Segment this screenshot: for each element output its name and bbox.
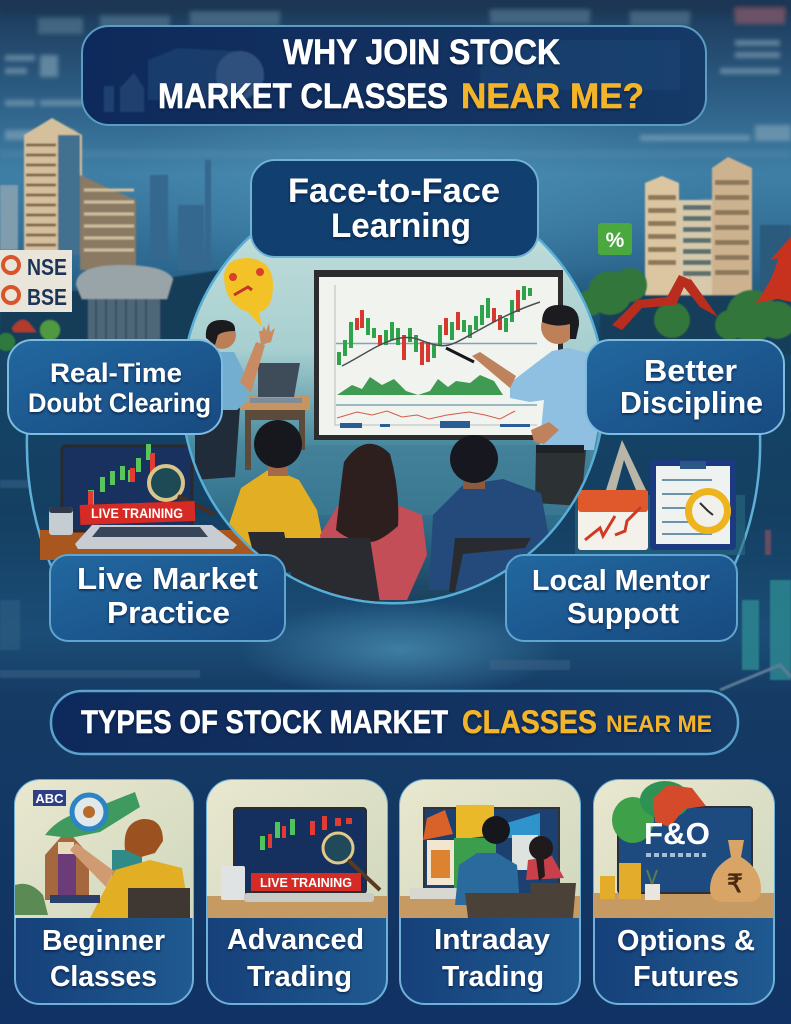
callout: Better Discipline: Better xyxy=(644,353,737,388)
section heading banner xyxy=(51,691,738,754)
card: Intraday Trading: Trading xyxy=(442,961,544,993)
card art: live training laptop: LIVE TRAINING xyxy=(260,875,352,890)
card art: beginner learner: ABC xyxy=(35,791,64,806)
callout: Real-Time Doubt Clearing: Real-Time xyxy=(50,358,182,388)
card art: F&O screen and money bag: F&O xyxy=(644,816,710,851)
card art: traders at screen xyxy=(400,780,580,918)
card: Advanced Trading: Advanced xyxy=(227,924,364,956)
callout: Face-to-Face Learning: Learning xyxy=(331,207,471,245)
audience: pink top student xyxy=(320,444,427,600)
NSE BSE sign xyxy=(0,250,72,312)
center classroom circle xyxy=(184,234,602,604)
section heading banner: TYPES OF STOCK MARKET xyxy=(81,704,448,740)
card: Intraday Trading: Intraday xyxy=(434,924,550,956)
card art: live training laptop xyxy=(207,780,387,918)
bottom right faded bars xyxy=(0,480,791,690)
callout: Face-to-Face Learning: Face-to-Face xyxy=(288,172,500,210)
card: Advanced Trading xyxy=(207,780,387,1004)
callout: Real-Time Doubt Clearing xyxy=(8,340,222,434)
NSE BSE sign: NSE xyxy=(27,254,67,280)
left laptop: live market practice: LIVE TRAINING xyxy=(91,505,183,521)
student raising hand xyxy=(195,320,310,480)
trees and red growth arrows xyxy=(577,237,791,342)
callout: Face-to-Face Learning xyxy=(251,160,538,257)
icon: green percent tag: % xyxy=(606,229,625,252)
icon: confused emoji speech bubble xyxy=(224,258,273,327)
card: Options and Futures xyxy=(594,780,774,1004)
audience: yellow shirt student xyxy=(227,420,323,560)
audience: navy shirt student xyxy=(429,435,550,590)
skyline right xyxy=(600,157,791,355)
callout: Local Mentor Suppott: Suppott xyxy=(567,598,679,630)
card: Options and Futures: Options & xyxy=(617,925,755,957)
callout: Local Mentor Suppott: Local Mentor xyxy=(532,565,710,597)
callout: Local Mentor Suppott xyxy=(506,555,737,641)
title text xyxy=(158,33,644,116)
outer ring arcs xyxy=(27,434,760,566)
title text: NEAR ME? xyxy=(461,77,644,116)
card: Beginner Classes xyxy=(15,780,193,1004)
card: Options and Futures: Futures xyxy=(633,961,739,993)
callout: Real-Time Doubt Clearing: Doubt Clearing xyxy=(28,388,211,418)
callout: Live Market Practice xyxy=(50,555,285,641)
callout: Live Market Practice: Live Market xyxy=(77,561,258,596)
left laptop: live market practice xyxy=(40,444,255,560)
section heading banner: NEAR ME xyxy=(606,711,712,738)
card art: F&O screen and money bag: ₹ xyxy=(727,870,743,898)
teacher pointing at chart xyxy=(446,305,602,506)
card: Intraday Trading xyxy=(400,780,580,1004)
callout: Better Discipline: Discipline xyxy=(620,385,763,420)
title text: MARKET CLASSES xyxy=(158,77,448,116)
section heading banner: CLASSES xyxy=(462,704,597,740)
skyline left xyxy=(0,118,220,352)
card art: F&O screen and money bag xyxy=(594,780,774,918)
right desk: calendar and clipboard xyxy=(575,440,745,555)
NSE BSE sign: BSE xyxy=(27,284,67,310)
card: Advanced Trading: Trading xyxy=(247,961,352,993)
faint banner artwork xyxy=(104,40,680,112)
card: Beginner Classes: Beginner xyxy=(42,925,165,957)
chairs xyxy=(248,532,531,603)
card art: beginner learner xyxy=(15,780,193,918)
callout: Live Market Practice: Practice xyxy=(107,595,230,630)
card: Beginner Classes: Classes xyxy=(50,961,157,993)
whiteboard with candlestick chart xyxy=(314,270,563,440)
title banner xyxy=(82,26,706,125)
icon: green percent tag xyxy=(598,223,632,255)
callout: Better Discipline xyxy=(586,340,784,434)
title text: WHY JOIN STOCK xyxy=(283,33,560,72)
